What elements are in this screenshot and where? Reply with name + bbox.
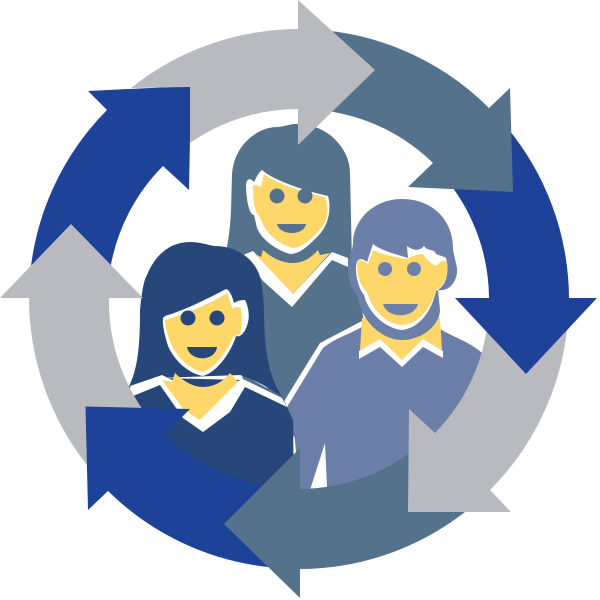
arrow: gray lower right: [408, 320, 567, 512]
arrow: blue right: [440, 125, 597, 374]
arrow: blue upper left: [31, 86, 191, 270]
arrow: slate upper right: [298, 29, 513, 192]
arrow: gray left: [0, 224, 143, 465]
arrow: slate bottom: [224, 445, 465, 598]
arrow: gray top: [131, 0, 375, 145]
arrow: blue lower left: [86, 406, 280, 567]
person: man: [283, 199, 500, 495]
people group: [120, 124, 500, 500]
person: front woman: [120, 242, 294, 500]
person: back woman: [226, 124, 366, 445]
